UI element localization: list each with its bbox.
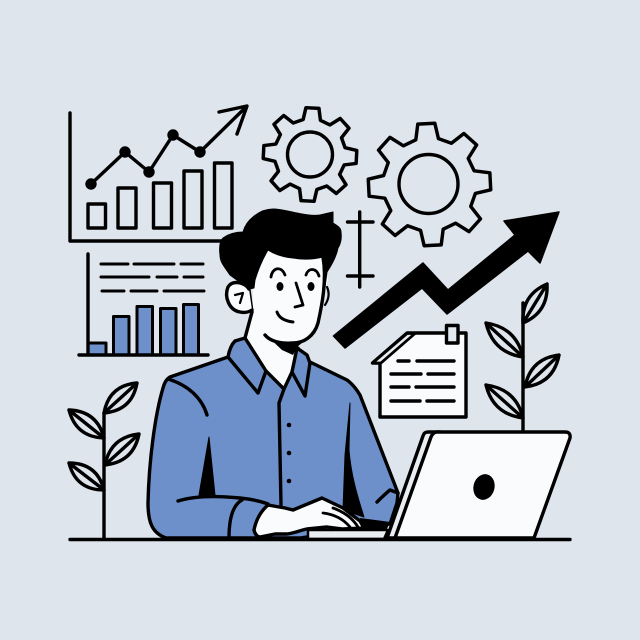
text lines [101, 264, 204, 291]
collar right [292, 348, 310, 396]
smile [277, 312, 293, 322]
collar left [228, 338, 266, 393]
left ear [227, 283, 252, 312]
icon: I-beam marker [348, 212, 373, 287]
right arm crease [377, 490, 398, 502]
nose [295, 283, 303, 307]
text lines [391, 361, 454, 401]
laptop logo [470, 472, 498, 502]
left arm crease [178, 497, 268, 504]
brows [271, 269, 319, 277]
small bar chart with text lines [79, 254, 208, 355]
buttons [287, 423, 291, 483]
right dart [343, 403, 364, 517]
plant: left [69, 383, 139, 539]
left cuff [229, 500, 242, 538]
axes [79, 254, 208, 355]
left dart [199, 437, 215, 495]
shoulder seam [168, 379, 207, 415]
blue bars [88, 304, 198, 355]
placket [279, 389, 284, 505]
laptop back strip [387, 432, 440, 538]
neck and face [245, 250, 328, 389]
fingers [323, 508, 358, 527]
roof line [372, 334, 415, 363]
ground line [70, 538, 570, 541]
keyboard base [308, 530, 388, 539]
shadow under hand [360, 518, 390, 531]
sticky note with roof [372, 326, 466, 417]
plant: right [486, 284, 559, 432]
tape [446, 326, 458, 343]
hair [220, 209, 341, 289]
shirt [148, 338, 398, 538]
big rising arrow [334, 212, 559, 348]
laptop [387, 432, 570, 538]
icon: large gear [366, 121, 493, 248]
icon: small gear [261, 106, 359, 203]
chart axes [70, 113, 226, 241]
trend line with arrow [87, 106, 247, 188]
chin shadow [265, 334, 307, 355]
eyes [276, 282, 284, 291]
right ear [325, 287, 329, 305]
laptop screen [395, 432, 570, 538]
note paper [372, 333, 466, 417]
outlined bars [88, 163, 232, 228]
person [148, 209, 398, 539]
line and bar chart with arrow [70, 106, 247, 241]
hand [254, 498, 364, 537]
